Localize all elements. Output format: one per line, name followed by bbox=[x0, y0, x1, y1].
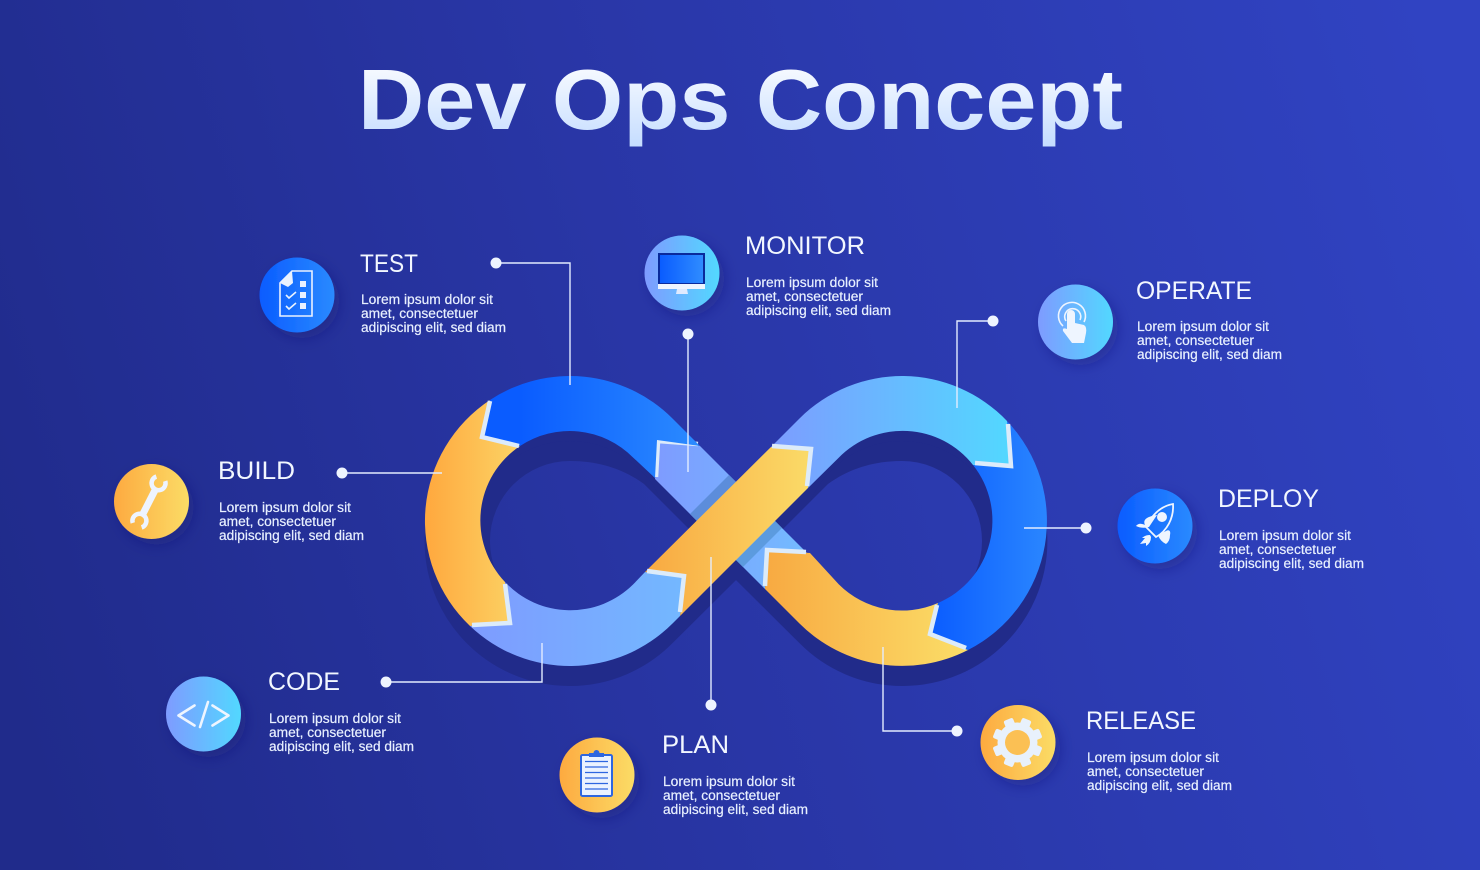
text: code description: Lorem ipsum dolor sit bbox=[269, 711, 401, 726]
text: operate description: adipiscing elit, sed diam bbox=[1137, 347, 1282, 362]
panel: build bbox=[114, 457, 442, 543]
text: monitor description: adipiscing elit, sed diam bbox=[746, 303, 891, 318]
text: release description bbox=[1087, 750, 1232, 793]
heading: build: BUILD bbox=[218, 457, 295, 485]
text: plan description bbox=[663, 774, 808, 817]
panel: operate bbox=[957, 277, 1282, 408]
text: code description bbox=[269, 711, 414, 754]
icon: rocket bbox=[1118, 488, 1192, 564]
segment: code bbox=[470, 572, 686, 666]
text: build description: adipiscing elit, sed diam bbox=[219, 528, 364, 543]
text: operate description: Lorem ipsum dolor sit bbox=[1137, 319, 1269, 334]
text: build description: amet, consectetuer bbox=[219, 514, 337, 529]
text: deploy description: amet, consectetuer bbox=[1219, 542, 1337, 557]
text: deploy description: Lorem ipsum dolor sit bbox=[1219, 528, 1351, 543]
heading: plan: PLAN bbox=[662, 731, 729, 759]
panel: deploy bbox=[1024, 485, 1364, 571]
connector: release bbox=[883, 647, 962, 736]
icon: monitor bbox=[644, 236, 720, 310]
text: deploy description bbox=[1219, 528, 1364, 571]
connector: operate bbox=[957, 316, 998, 408]
text: code description: adipiscing elit, sed diam bbox=[269, 739, 414, 754]
text: plan description: amet, consectetuer bbox=[663, 788, 781, 803]
connector: plan bbox=[706, 557, 716, 710]
heading: release: RELEASE bbox=[1086, 707, 1196, 735]
infinity drop shadow bbox=[452, 424, 1020, 658]
panel: code bbox=[166, 643, 542, 754]
segment dividers bbox=[472, 401, 1011, 648]
icon: gear bbox=[980, 705, 1056, 780]
segment: release bbox=[765, 550, 968, 666]
icon: code brackets bbox=[166, 676, 241, 752]
heading: test: TEST bbox=[360, 250, 418, 278]
connector: monitor bbox=[682, 328, 694, 472]
text: plan description: adipiscing elit, sed diam bbox=[663, 802, 808, 817]
segment: plan bbox=[645, 447, 812, 616]
text: operate description: amet, consectetuer bbox=[1137, 333, 1255, 348]
text: operate description bbox=[1137, 319, 1282, 362]
panel: test bbox=[260, 250, 570, 385]
text: build description: Lorem ipsum dolor sit bbox=[219, 500, 351, 515]
panel: plan bbox=[560, 557, 808, 817]
heading: deploy: DEPLOY bbox=[1218, 485, 1319, 513]
heading: monitor: MONITOR bbox=[745, 232, 865, 260]
panel: monitor bbox=[644, 232, 891, 472]
title: Dev Ops Concept bbox=[358, 53, 1123, 148]
connector: code bbox=[380, 643, 542, 688]
connector: build bbox=[336, 468, 442, 478]
text: build description bbox=[219, 500, 364, 543]
text: monitor description: amet, consectetuer bbox=[746, 289, 864, 304]
connector: deploy bbox=[1024, 522, 1092, 534]
segment: monitor diagonal bbox=[655, 440, 810, 589]
text: deploy description: adipiscing elit, sed diam bbox=[1219, 556, 1364, 571]
text: monitor description: Lorem ipsum dolor sit bbox=[746, 275, 878, 290]
icon: wrench bbox=[114, 464, 189, 539]
icon: checklist bbox=[260, 258, 334, 332]
text: test description bbox=[361, 292, 506, 335]
text: test description: amet, consectetuer bbox=[361, 306, 479, 321]
text: test description: Lorem ipsum dolor sit bbox=[361, 292, 493, 307]
heading: operate: OPERATE bbox=[1136, 277, 1252, 305]
segment: build bbox=[425, 400, 520, 626]
panel: release bbox=[883, 647, 1232, 793]
segment: deploy bbox=[928, 421, 1047, 650]
segment: test bbox=[480, 376, 700, 478]
connector: test bbox=[490, 258, 570, 385]
text: monitor description bbox=[746, 275, 891, 318]
infinity loop diagram bbox=[425, 376, 1047, 666]
segment: operate bbox=[771, 376, 1013, 488]
text: release description: adipiscing elit, sed diam bbox=[1087, 778, 1232, 793]
text: release description: amet, consectetuer bbox=[1087, 764, 1205, 779]
icon: clipboard bbox=[560, 738, 634, 812]
heading: code: CODE bbox=[268, 668, 340, 696]
text: code description: amet, consectetuer bbox=[269, 725, 387, 740]
icon: touch hand bbox=[1038, 284, 1113, 360]
text: plan description: Lorem ipsum dolor sit bbox=[663, 774, 795, 789]
text: release description: Lorem ipsum dolor sit bbox=[1087, 750, 1219, 765]
text: test description: adipiscing elit, sed diam bbox=[361, 320, 506, 335]
